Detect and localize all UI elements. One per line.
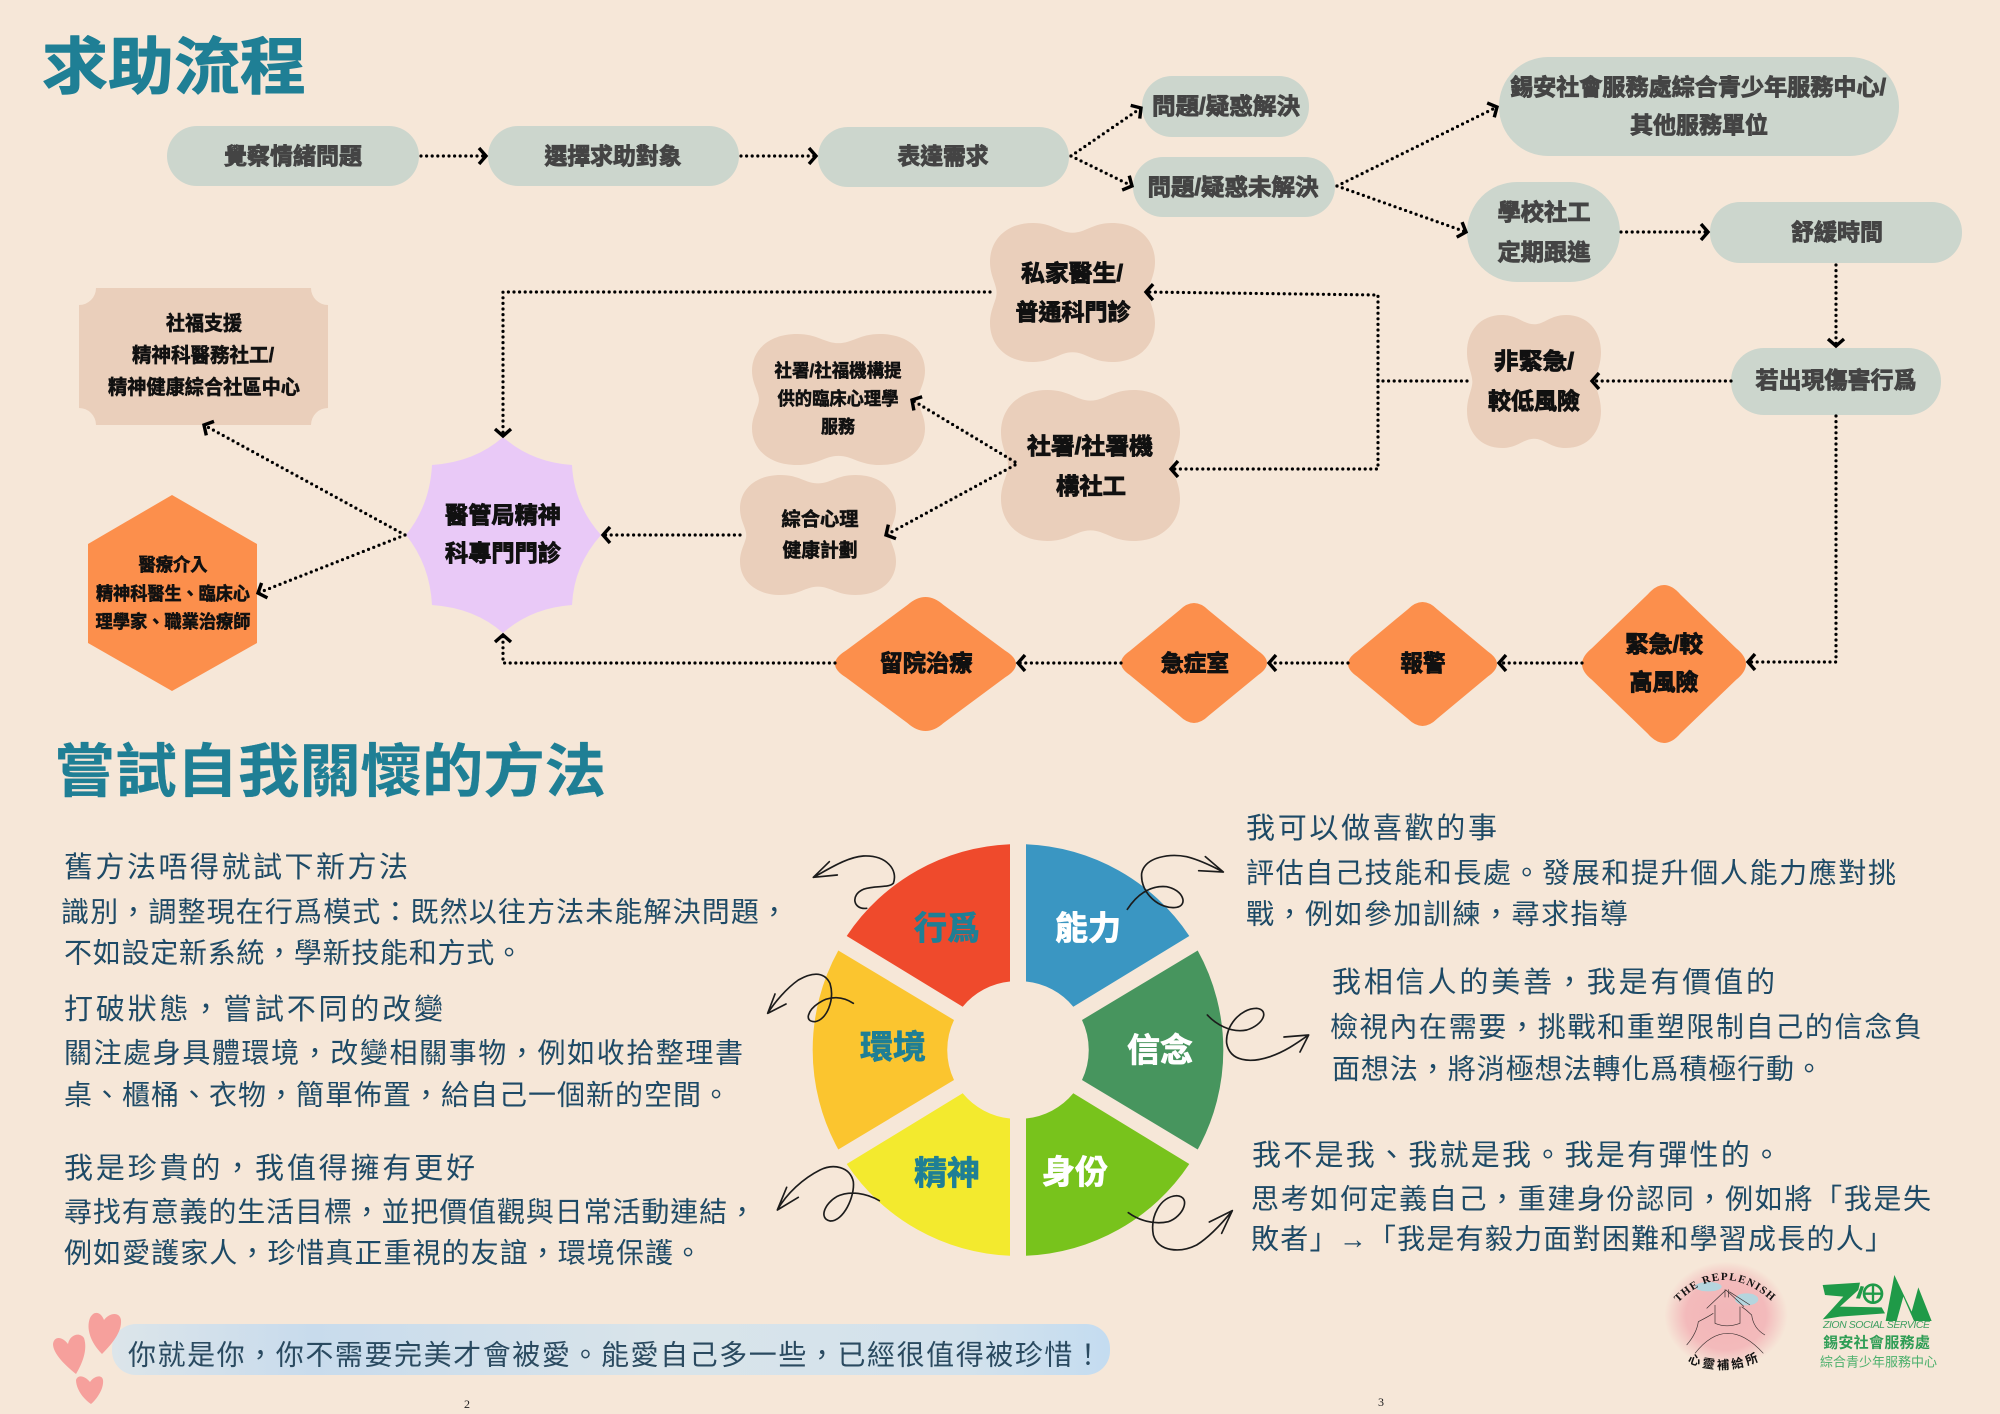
node: clinical psychology service	[752, 334, 925, 465]
node: call the police: 報警	[1400, 650, 1446, 676]
wheel segment: spirit: 精神	[914, 1154, 980, 1192]
node: welfare support: 精神科醫務社工/	[132, 344, 274, 367]
wheel segment: environment: 環境	[860, 1028, 926, 1066]
node: private doctor or general clinic: 私家醫生/	[1021, 260, 1124, 286]
arrow: express to unsolved	[1071, 156, 1132, 186]
text block: I am precious: 尋找有意義的生活目標，並把價值觀與日常活動連結，	[64, 1196, 756, 1228]
node: welfare support	[79, 288, 328, 425]
node: school social worker	[1467, 182, 1620, 282]
node: express needs: 表達需求	[898, 143, 988, 169]
text block: break the state	[64, 993, 743, 1110]
text block: I believe in goodness: 我相信人的美善，我是有價值的	[1332, 966, 1775, 999]
wheel segment: behaviour: 行爲	[914, 910, 980, 946]
arrow: unsolved to school social worker	[1337, 186, 1466, 232]
node: Zion centre or other services: 錫安社會服務處綜合青少年服務中心/	[1510, 74, 1887, 100]
logo: The Replenish: THE REPLENISH	[1673, 1272, 1776, 1302]
node: clinical psychology service: 社署/社福機構提	[774, 360, 902, 381]
wheel segment: environment	[813, 950, 954, 1150]
text block: I am precious: 例如愛護家人，珍惜真正重視的友誼，環境保護。	[64, 1238, 702, 1268]
node: agency social worker: 社署/社署機	[1027, 433, 1153, 459]
node: integrated mental health programme: 健康計劃	[782, 538, 858, 562]
node: problem solved	[1142, 76, 1309, 137]
logo: The Replenish: 心靈補給所	[1688, 1352, 1758, 1370]
wheel chart: six self-care domains	[813, 844, 1223, 1256]
arrow: private doctor to psychiatric clinic	[503, 292, 990, 436]
text block: do what I like: 戰，例如參加訓練，尋求指導	[1246, 898, 1628, 930]
text block: I am precious	[64, 1152, 756, 1268]
node: problem unsolved	[1133, 157, 1335, 217]
curly arrows from wheel to text	[768, 856, 1309, 1250]
arrow: behaviour to urgent	[1748, 416, 1836, 662]
node: clinical psychology service: 供的臨床心理學	[778, 388, 898, 409]
wheel segment: belief	[1082, 950, 1223, 1150]
node: clinical psychology service: 服務	[821, 417, 855, 437]
logo: The Replenish	[1668, 1265, 1784, 1370]
node: emergency room	[1121, 603, 1267, 723]
node: Zion centre or other services	[1499, 57, 1899, 156]
arrow: relief time to behaviour	[1834, 265, 1838, 346]
title: self-care methods: 嘗試自我關懷的方法	[54, 740, 606, 804]
arrow: psychiatric clinic to welfare support	[204, 425, 405, 535]
wheel segment: behaviour	[847, 844, 1010, 1007]
node: notice emotional problem	[167, 126, 419, 186]
arrow: police to emergency room	[1269, 661, 1348, 665]
node: express needs	[818, 127, 1069, 187]
text block: do what I like: 我可以做喜歡的事	[1246, 812, 1497, 845]
logo: Zion Social Service: 綜合青少年服務中心	[1820, 1354, 1937, 1370]
text block: I am resilient: 我不是我、我就是我。我是有彈性的。	[1252, 1139, 1781, 1172]
arrow: emergency room to hospital	[1018, 661, 1121, 665]
wheel segment: ability	[1026, 844, 1189, 1007]
arrow: non-urgent to private doctor	[1146, 292, 1467, 381]
node: non-urgent lower risk: 較低風險	[1488, 388, 1580, 414]
node: relief time	[1710, 202, 1962, 263]
text block: break the state: 打破狀態，嘗試不同的改變	[64, 993, 443, 1026]
text block: break the state: 桌、櫃桶、衣物，簡單佈置，給自己一個新的空間。	[64, 1080, 730, 1110]
text block: I am resilient: 思考如何定義自己，重建身份認同，例如將「我是失	[1251, 1184, 1931, 1214]
text block: do what I like	[1246, 812, 1896, 930]
node: choose who to ask: 選擇求助對象	[544, 143, 682, 169]
node: Hospital Authority psychiatric clinic: 醫管局精神	[445, 502, 561, 528]
arrow: urgent to police	[1499, 661, 1582, 665]
node: agency social worker: 構社工	[1056, 473, 1126, 499]
node: school social worker: 學校社工	[1498, 199, 1590, 225]
arrow: express to solved	[1071, 108, 1141, 156]
node: problem unsolved: 問題/疑惑未解決	[1148, 174, 1318, 200]
wheel segment: ability: 能力	[1055, 910, 1121, 946]
arrow: social worker to clinical psychology	[912, 400, 1015, 462]
arrow: hospital to psychiatric clinic	[503, 635, 835, 663]
arrow: choose to express	[741, 154, 816, 158]
node: problem solved: 問題/疑惑解決	[1152, 93, 1300, 119]
arrow: social worker to integrated programme	[886, 465, 1015, 535]
icon: hearts	[53, 1313, 121, 1404]
text block: I believe in goodness: 檢視內在需要，挑戰和重塑限制自己的信念負	[1330, 1012, 1922, 1042]
arrow: behaviour to non-urgent	[1592, 379, 1731, 383]
text block: try new methods	[61, 851, 788, 968]
text block: I am resilient	[1251, 1139, 1931, 1254]
node: urgent higher risk	[1582, 585, 1746, 743]
curly arrow: environment	[768, 974, 853, 1022]
node: self-harm behaviour appears	[1731, 348, 1941, 415]
arrow: psychiatric clinic to medical intervention	[258, 535, 405, 593]
page number 2: 2	[464, 1397, 470, 1411]
arrow: school social worker to relief time	[1621, 230, 1708, 234]
node: Zion centre or other services: 其他服務單位	[1630, 112, 1768, 138]
curly arrow: identity	[1128, 1196, 1232, 1250]
text block: I believe in goodness	[1330, 966, 1922, 1084]
node: integrated mental health programme	[740, 475, 896, 595]
curly arrow: ability	[1127, 856, 1223, 909]
text block: try new methods: 舊方法唔得就試下新方法	[64, 851, 408, 884]
node: welfare support: 社福支援	[166, 312, 242, 335]
title: help-seeking process: 求助流程	[42, 34, 306, 102]
node: non-urgent lower risk	[1467, 315, 1601, 448]
node: hospital admission: 留院治療	[880, 650, 972, 676]
page number 3: 3	[1378, 1395, 1384, 1409]
node: medical intervention hexagon: 醫療介入	[138, 555, 208, 575]
node: private doctor or general clinic	[990, 223, 1155, 362]
node: medical intervention hexagon: 精神科醫生、臨床心	[96, 583, 250, 604]
logo: Zion Social Service: ZION SOCIAL SERVICE	[1822, 1319, 1931, 1331]
text block: I am precious: 我是珍貴的，我值得擁有更好	[64, 1152, 475, 1185]
text block: try new methods: 不如設定新系統，學新技能和方式。	[64, 938, 523, 968]
arrow: notice to choose	[421, 154, 486, 158]
node: hospital admission	[835, 597, 1016, 731]
node: emergency room: 急症室	[1161, 650, 1229, 676]
node: notice emotional problem: 覺察情緒問題	[224, 143, 362, 169]
text block: do what I like: 評估自己技能和長處。發展和提升個人能力應對挑	[1246, 858, 1896, 888]
arrow: integrated programme to psychiatric clinic	[603, 533, 740, 537]
wheel segment: identity: 身份	[1042, 1154, 1108, 1190]
node: medical intervention hexagon	[88, 495, 257, 691]
text block: I am resilient: 敗者」→「我是有毅力面對困難和學習成長的人」	[1251, 1224, 1893, 1254]
node: self-harm behaviour appears: 若出現傷害行爲	[1756, 367, 1916, 393]
node: medical intervention hexagon: 理學家、職業治療師	[96, 611, 250, 632]
curly arrow: behaviour	[813, 856, 894, 908]
text block: I believe in goodness: 面想法，將消極想法轉化爲積極行動。	[1332, 1054, 1823, 1084]
wheel segment: spirit	[847, 1093, 1010, 1256]
node: private doctor or general clinic: 普通科門診	[1016, 299, 1130, 325]
logo: Zion Social Service: 錫安社會服務處	[1823, 1334, 1930, 1352]
node: welfare support: 精神健康綜合社區中心	[108, 375, 300, 399]
banner: closing message: 你就是你，你不需要完美才會被愛。能愛自己多一些，已經很值得被珍惜！	[128, 1340, 1102, 1370]
node: agency social worker	[1001, 390, 1180, 541]
logo: Zion Social Service	[1820, 1275, 1937, 1370]
arrow: unsolved to Zion centre	[1337, 107, 1497, 186]
curly arrow: spirit	[777, 1167, 879, 1221]
wheel segment: identity	[1026, 1093, 1189, 1256]
wheel segment: belief: 信念	[1127, 1032, 1193, 1068]
node: Hospital Authority psychiatric clinic	[406, 437, 601, 633]
text block: break the state: 關注處身具體環境，改變相關事物，例如收拾整理書	[64, 1038, 743, 1068]
node: call the police	[1348, 602, 1497, 726]
arrow: non-urgent to agency social worker	[1171, 381, 1378, 469]
text block: try new methods: 識別，調整現在行爲模式：既然以往方法未能解決問題，	[61, 896, 788, 928]
curly arrow: belief	[1207, 1008, 1309, 1060]
node: non-urgent lower risk: 非緊急/	[1494, 348, 1575, 374]
node: choose who to ask	[488, 126, 739, 186]
node: relief time: 舒緩時間	[1791, 219, 1883, 245]
node: urgent higher risk: 緊急/較	[1625, 631, 1703, 657]
node: urgent higher risk: 高風險	[1630, 669, 1698, 695]
banner: closing message	[112, 1324, 1110, 1375]
node: integrated mental health programme: 綜合心理	[782, 508, 858, 530]
node: Hospital Authority psychiatric clinic: 科專門門診	[445, 540, 561, 566]
node: school social worker: 定期跟進	[1498, 239, 1590, 265]
